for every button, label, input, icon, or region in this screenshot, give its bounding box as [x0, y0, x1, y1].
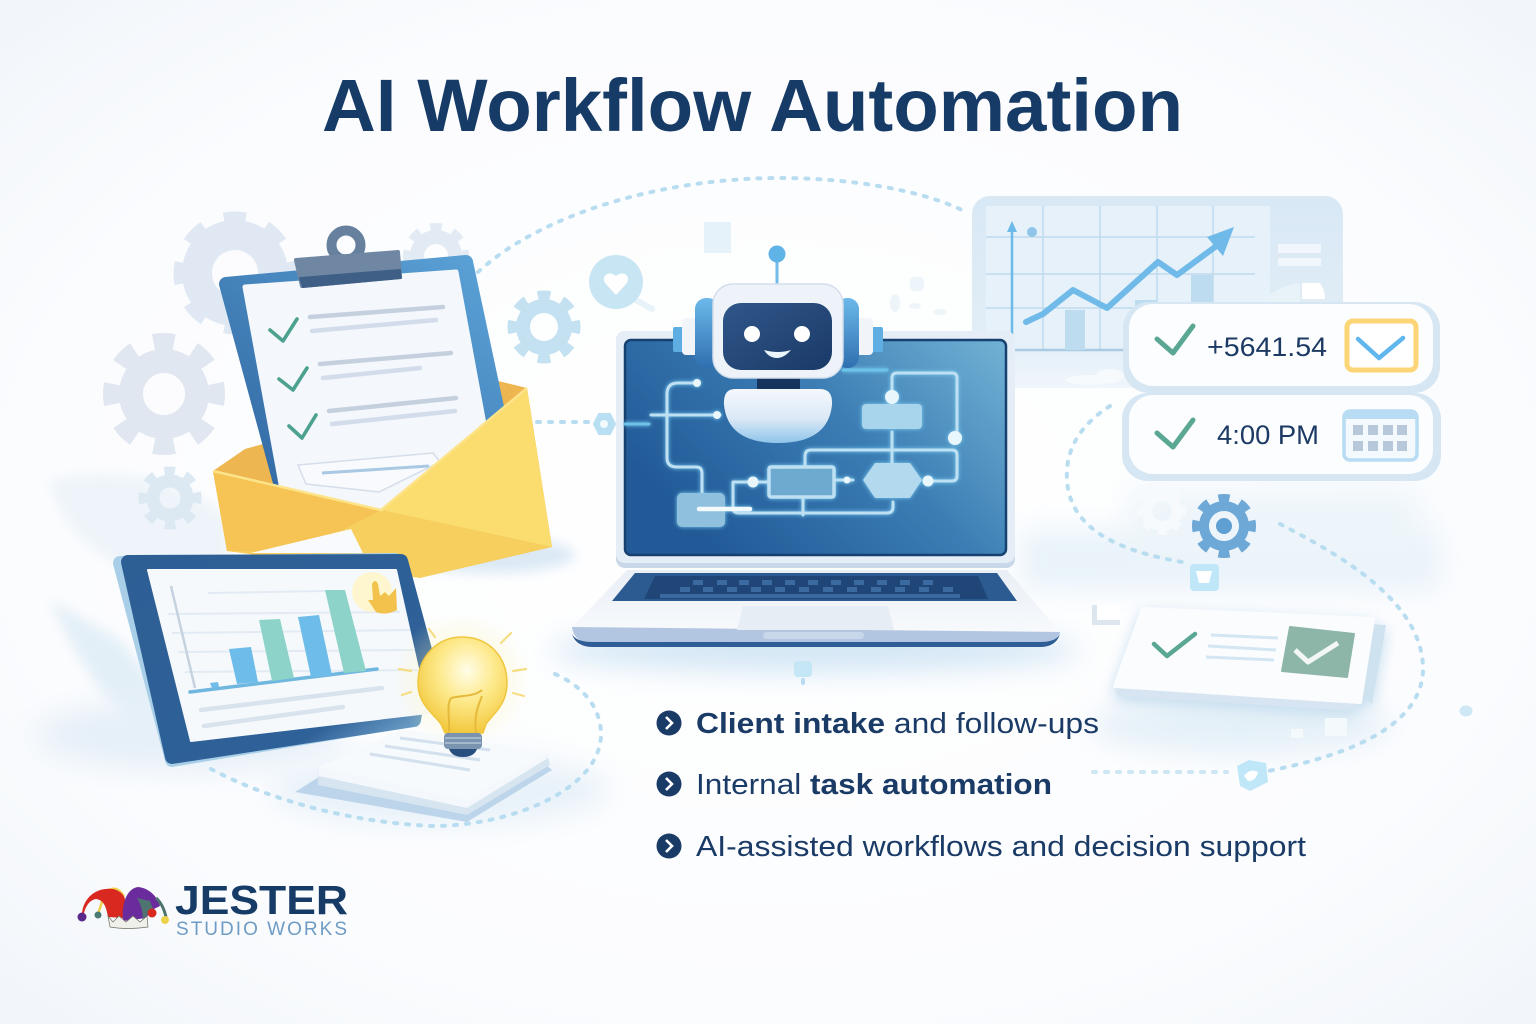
bullet icon 3 [656, 834, 682, 858]
icon: calendar [1344, 411, 1417, 460]
flowchart [625, 370, 962, 527]
stack of papers [295, 729, 552, 822]
trackpad [737, 606, 894, 630]
floating dot [1460, 706, 1472, 716]
dashed connector paths [211, 178, 1423, 826]
envelope front bottom [213, 471, 552, 578]
approval stamp [1282, 627, 1354, 677]
soft background washes [35, 474, 1440, 826]
pale square [704, 222, 731, 253]
gear: white [1137, 486, 1187, 536]
time value: 4:00 PM [1217, 420, 1319, 450]
laptop base [572, 570, 1060, 647]
robot smile [764, 350, 791, 358]
check 2 [279, 368, 307, 390]
checklist paper [245, 272, 484, 510]
status card: time [1122, 393, 1441, 481]
keyboard [612, 573, 1017, 601]
robot body [724, 389, 832, 443]
time check [1157, 420, 1193, 447]
bullet text 1: Client intake and follow-ups [696, 708, 1099, 740]
checklist lines [310, 307, 456, 424]
laptop [572, 246, 1060, 647]
chart gridlines [168, 591, 420, 672]
chart bars [1065, 275, 1213, 350]
chart plot [986, 206, 1270, 350]
flow start bar [699, 507, 750, 511]
icon: pointing hand [352, 572, 397, 614]
logo [78, 877, 348, 940]
flow process box [769, 467, 834, 497]
status card: amount [1123, 302, 1440, 393]
flow nodes [693, 379, 962, 488]
approval card [1115, 609, 1386, 711]
check 1 [270, 319, 297, 341]
icon: heart magnifier [589, 255, 652, 309]
icon: envelope [1347, 321, 1416, 370]
tablet frame [128, 561, 425, 757]
clip body [296, 252, 401, 287]
robot ears [673, 298, 883, 368]
flow start box [677, 493, 725, 527]
robot antenna [768, 246, 786, 284]
robot eyes [744, 326, 810, 342]
gear: lower left [138, 466, 202, 530]
chart panel background [972, 196, 1343, 388]
small squares [1291, 718, 1347, 738]
tablet with bar chart [120, 560, 428, 760]
chart grid [986, 206, 1270, 350]
robot [673, 246, 883, 443]
trend arrow [1026, 227, 1234, 322]
amount value: +5641.54 [1207, 332, 1327, 362]
chart axis [171, 586, 195, 688]
flow rectangle [862, 404, 922, 429]
logo word: jester: JESTER [175, 877, 348, 923]
envelope left flap [213, 471, 381, 552]
check 3 [289, 415, 316, 438]
square connector node [1190, 564, 1219, 591]
connector node below laptop [794, 661, 812, 677]
tablet text lines [201, 688, 382, 726]
gear: small top [402, 222, 470, 290]
loose sheet [251, 529, 363, 553]
approval check [1154, 634, 1195, 656]
flow hexagon [863, 463, 922, 498]
hex connector node right [1237, 760, 1268, 791]
connector hex node left [594, 414, 615, 434]
chart bars [210, 590, 366, 688]
amount check [1157, 326, 1193, 353]
title: AI Workflow Automation [322, 64, 1183, 147]
gear: blue [1191, 493, 1257, 559]
laptop notch [763, 632, 864, 639]
icon: light bulb [394, 612, 530, 757]
gear: left grey [102, 332, 226, 456]
small paper [1092, 605, 1120, 625]
laptop lid [616, 331, 1015, 568]
bullet text 3: AI-assisted workflows and decision support [696, 831, 1306, 863]
robot face [723, 303, 832, 370]
pale blobs under chart [1066, 369, 1124, 385]
laptop screen [625, 340, 1006, 555]
small note [298, 453, 440, 492]
jester hat icon [78, 887, 169, 928]
bullet icon 1 [656, 710, 682, 736]
clip ring [332, 230, 360, 260]
envelope back [213, 380, 552, 551]
logo word: studio works: STUDIO WORKS [176, 919, 347, 940]
chart y axis [1007, 221, 1037, 338]
robot neck [757, 376, 800, 392]
bullet icon 2 [656, 772, 682, 796]
gear: large back left [172, 210, 298, 336]
envelope with clipboard [213, 230, 552, 578]
bullet list [656, 708, 1306, 863]
tablet screen [148, 570, 428, 741]
bullet text 2: Internal task automation [696, 769, 1052, 801]
envelope right flap [381, 388, 552, 547]
chart baseline [190, 669, 377, 692]
gear: light blue [506, 289, 582, 365]
chart side lines [1263, 244, 1325, 303]
clipboard board [226, 262, 498, 505]
pale dabs by robot [890, 277, 947, 315]
robot head [713, 284, 843, 378]
tablet light edge [120, 560, 420, 760]
approval lines [1206, 635, 1278, 660]
